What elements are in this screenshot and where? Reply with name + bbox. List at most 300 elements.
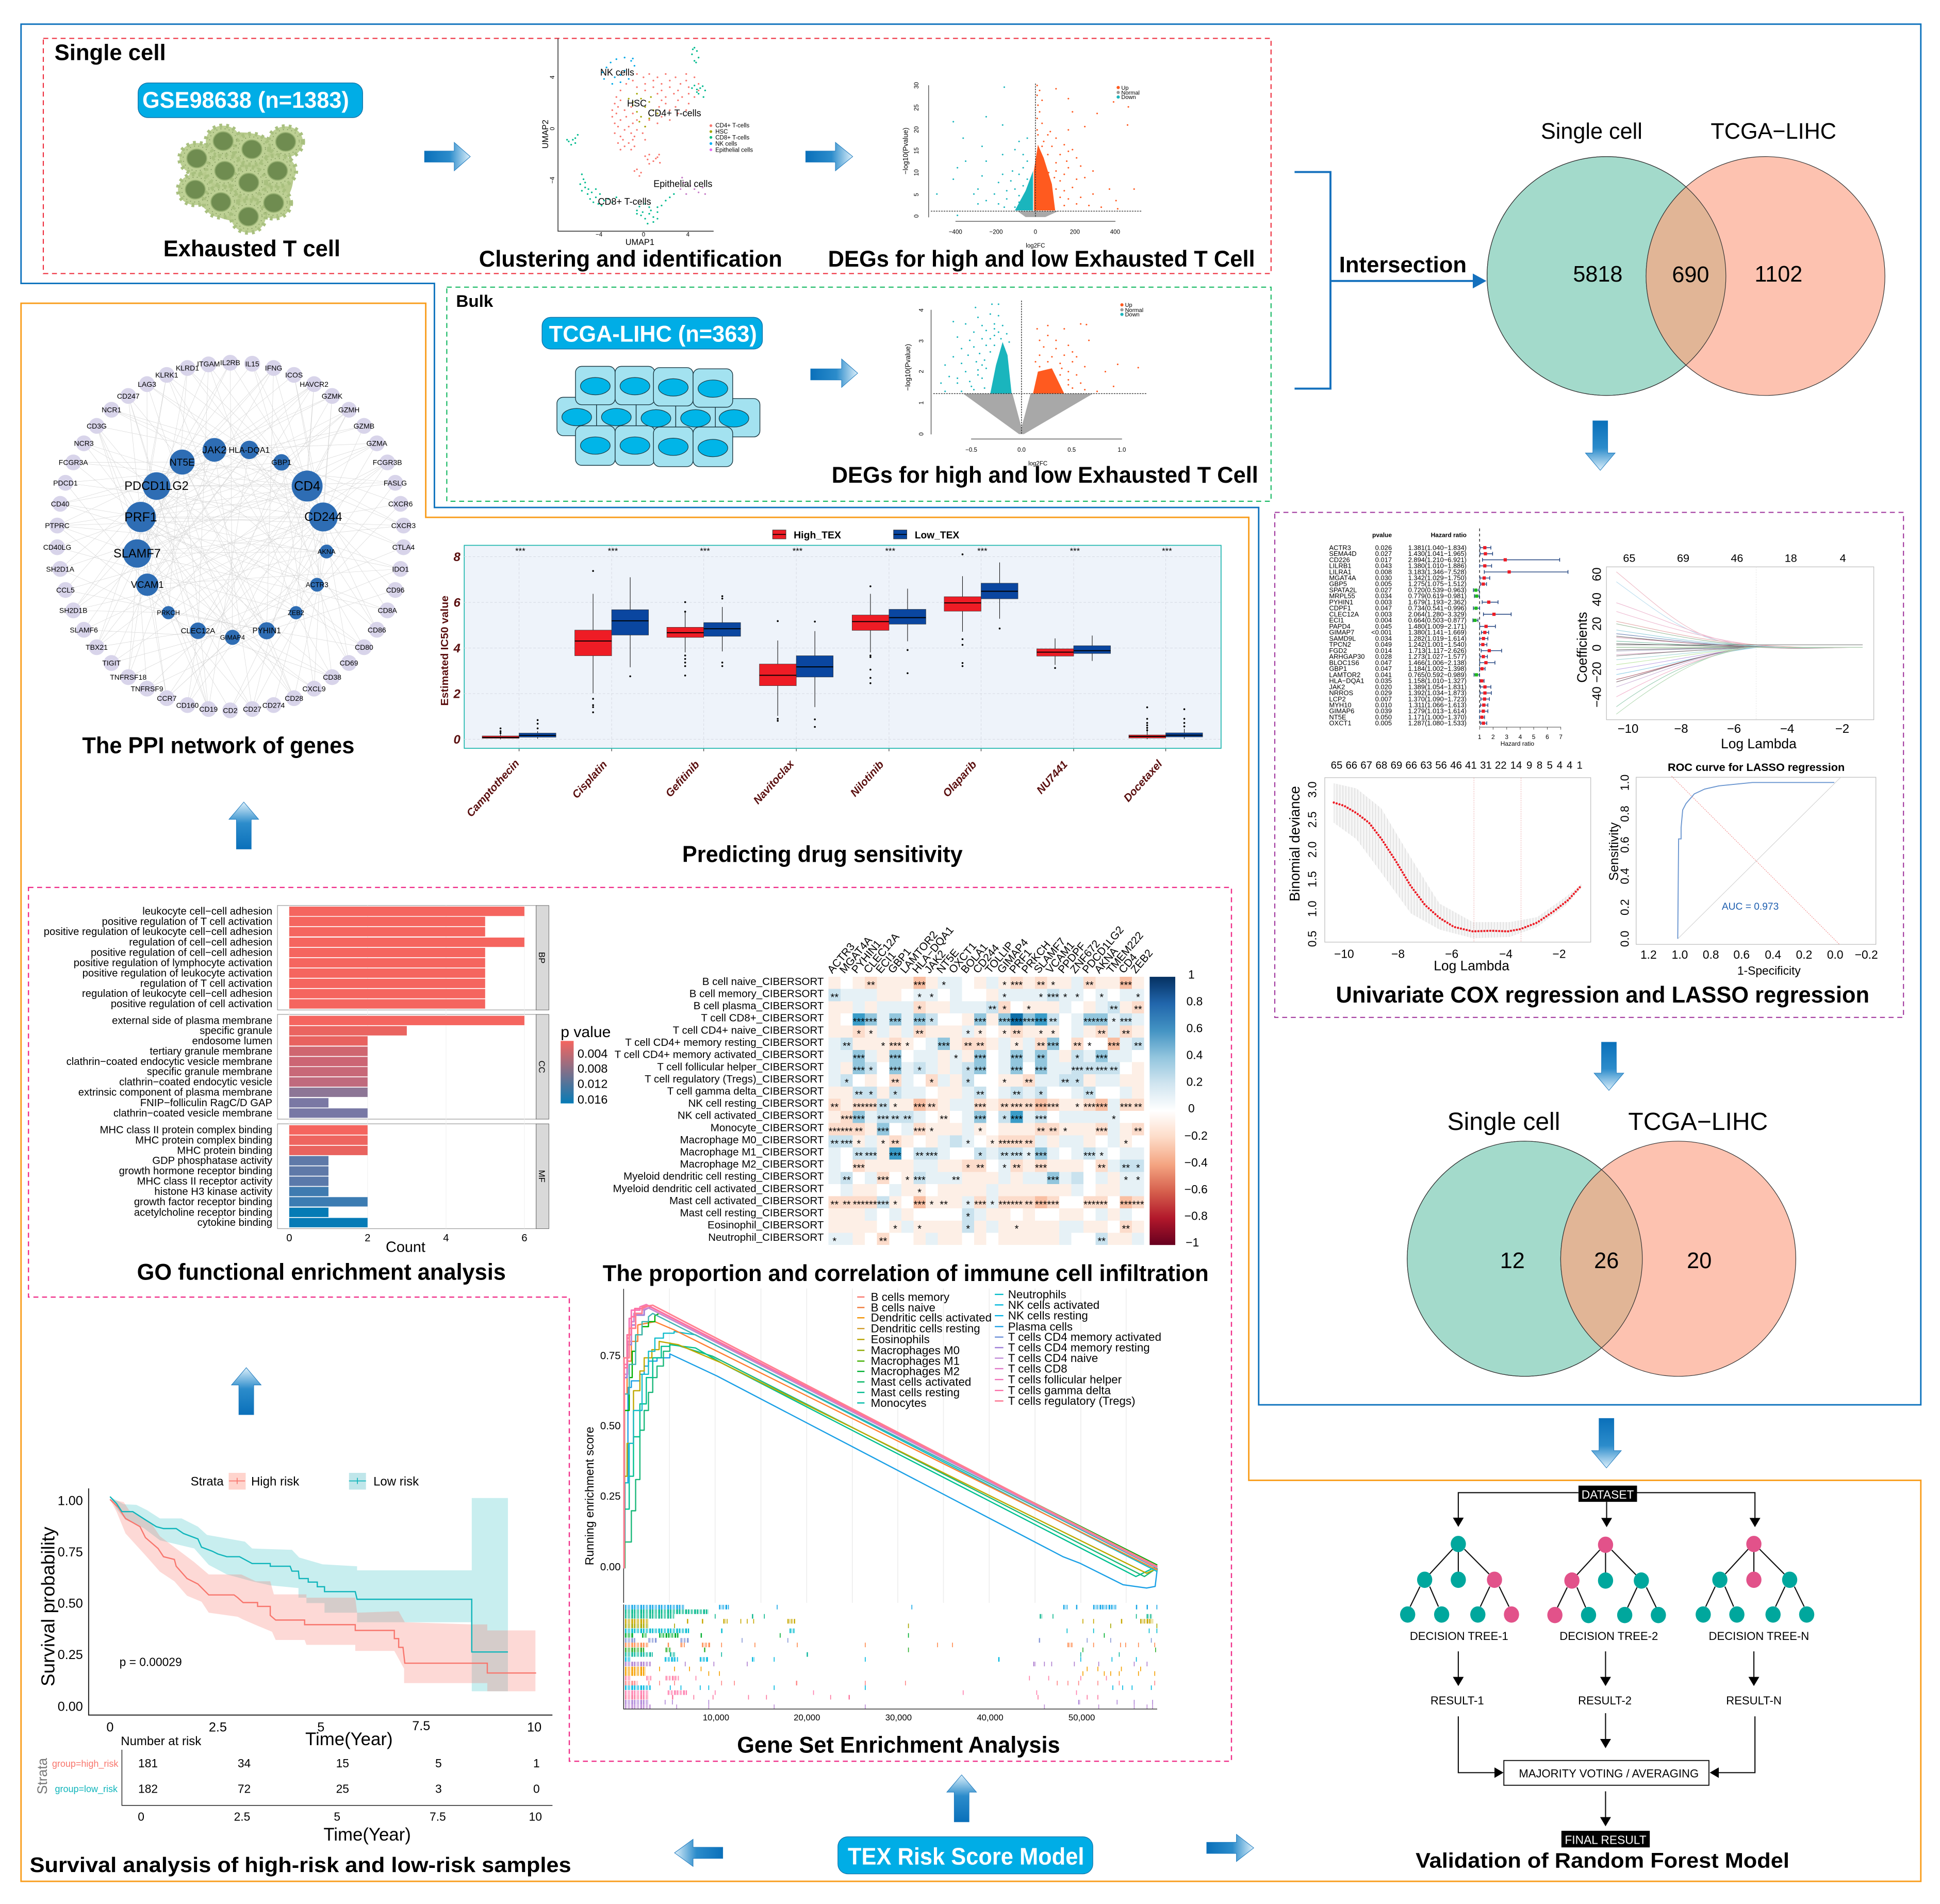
- chart: univariate Cox forest plot: GIMAP6: [1329, 707, 1354, 715]
- chart: PPI network: CD4: [294, 479, 320, 494]
- chart: univariate Cox forest plot: 1.480(1.009−2.171): [1408, 622, 1467, 630]
- chart: PPI network: HLA-DQA1: [229, 446, 270, 455]
- chart: drug sensitivity boxplots: Camptothecin: [464, 758, 522, 819]
- chart: drug sensitivity boxplots: Navitoclax: [751, 758, 797, 807]
- chart: univariate Cox forest plot: 0.664(0.503−0.877): [1408, 616, 1467, 624]
- legend: p value: 0.004: [578, 1047, 608, 1060]
- diagram: random forest: DATASET: [1582, 1488, 1634, 1501]
- chart: drug sensitivity boxplots: 4: [453, 642, 461, 655]
- caption: exhausted T cell: Exhausted T cell: [163, 236, 340, 261]
- chart: LASSO binomial deviance: −8: [1391, 947, 1405, 961]
- chart: univariate Cox forest plot: 1.392(1.034−1.873): [1408, 689, 1467, 697]
- chart: PPI network: CD160: [176, 701, 199, 709]
- chart: LASSO binomial deviance: 31: [1480, 760, 1492, 771]
- chart: GO enrichment bars: endosome lumen: [192, 1036, 272, 1047]
- legend: volcano: Down: [1121, 94, 1136, 101]
- chart: Kaplan-Meier survival curves: 2.5: [209, 1720, 227, 1735]
- arrow: up to GO panel: [232, 1368, 261, 1415]
- bracket arrow: intersection: [1294, 172, 1476, 389]
- legend: survival strata: [191, 1473, 419, 1489]
- table: number at risk: Strata: [35, 1758, 50, 1794]
- chart: LASSO binomial deviance: 3.0: [1305, 781, 1319, 798]
- chart: GO enrichment bars: MHC protein binding: [177, 1145, 272, 1156]
- chart: univariate Cox forest plot: 1.466(1.006−2.138): [1408, 659, 1467, 666]
- chart: LASSO binomial deviance: 41: [1465, 760, 1477, 771]
- chart: GO enrichment bars: growth hormone receptor binding: [119, 1166, 272, 1177]
- chart: immune correlation heatmap: JAK2: [923, 948, 948, 976]
- chart: ROC curve: 0.8: [1618, 806, 1631, 822]
- chart: UMAP clustering: [541, 39, 753, 247]
- chart: GO enrichment bars: specific granule membrane: [147, 1066, 272, 1078]
- legend: UMAP clusters: [710, 123, 753, 153]
- chart: LASSO coefficient paths: 18: [1785, 552, 1797, 565]
- chart: univariate Cox forest plot: 1.430(1.041−1.965): [1408, 550, 1467, 557]
- chart: univariate Cox forest plot: 0.039: [1375, 707, 1392, 715]
- chart: bulk volcano plot: 1.0: [1117, 447, 1126, 453]
- caption: single-cell DEGs: DEGs for high and low Exhausted T Cell: [828, 247, 1255, 272]
- chart: univariate Cox forest plot: LILRA1: [1329, 568, 1352, 576]
- panel frame: bulk: [447, 287, 1271, 501]
- chart: immune correlation heatmap: T cell CD4+ naive_CIBERSORT: [673, 1024, 824, 1036]
- legend: UMAP clusters: HSC: [715, 129, 728, 135]
- arrow: venn to cox: [1585, 421, 1615, 470]
- arrow: up to GSEA: [947, 1775, 977, 1822]
- chart: univariate Cox forest plot: 1.275(1.075−1.512): [1408, 580, 1467, 588]
- chart: univariate Cox forest plot: BLOC1S6: [1329, 659, 1359, 666]
- venn diagram: second intersection: Single cell: [1448, 1108, 1560, 1136]
- arrow: right to random forest: [1207, 1834, 1254, 1862]
- chart: GO enrichment bars: acetylcholine receptor binding: [134, 1207, 272, 1218]
- button: TEX risk score model: [838, 1837, 1093, 1874]
- chart: univariate Cox forest plot: 0.041: [1375, 671, 1392, 679]
- chart: immune correlation heatmap: TMEM222: [1105, 930, 1146, 976]
- chart: univariate Cox forest plot: HLA−DQA1: [1329, 677, 1364, 685]
- chart: immune correlation heatmap: CLEC12A: [862, 931, 902, 976]
- legend: GSEA immune cell sets: Mast cells resting: [871, 1386, 960, 1399]
- legend: p value: [561, 1024, 611, 1106]
- chart: univariate Cox forest plot: SEMA4D: [1329, 550, 1357, 557]
- chart: LASSO binomial deviance: −10: [1334, 947, 1354, 961]
- chart: univariate Cox forest plot: 1.184(1.002−1.398): [1408, 665, 1467, 672]
- chart: GO enrichment bars: MHC class II protein complex binding: [100, 1124, 272, 1136]
- chart: immune correlation heatmap: T cell gamma delta_CIBERSORT: [667, 1086, 824, 1097]
- chart: LASSO binomial deviance: 63: [1420, 760, 1432, 771]
- chart: immune correlation heatmap: B cell plasma_CIBERSORT: [694, 1000, 824, 1012]
- chart: univariate Cox forest plot: 0.010: [1375, 701, 1392, 709]
- chart: ROC curve: 0.6: [1618, 836, 1631, 853]
- chart: PPI network: ITGAM: [197, 359, 220, 368]
- panel frame: single cell: [43, 38, 1271, 273]
- chart: GO enrichment bars: MHC protein complex binding: [135, 1135, 272, 1146]
- chart: immune correlation heatmap: ACTR3: [825, 941, 857, 976]
- chart: univariate Cox forest plot: 0.026: [1375, 544, 1392, 551]
- venn diagram: first intersection: [1487, 119, 1885, 396]
- chart: GO enrichment bars: GDP phosphatase activity: [152, 1155, 273, 1167]
- chart: PPI network: GIMAP4: [220, 633, 245, 641]
- legend: UMAP clusters: NK cells: [715, 141, 737, 147]
- chart: single-cell volcano plot: 5: [914, 193, 920, 196]
- chart: univariate Cox forest plot: 0.007: [1375, 695, 1392, 703]
- chart: drug sensitivity boxplots: 0: [453, 733, 461, 747]
- diagram: random forest: RESULT-2: [1578, 1694, 1632, 1707]
- chart: LASSO binomial deviance: 8: [1537, 760, 1542, 771]
- chart: LASSO binomial deviance: −2: [1553, 947, 1566, 961]
- chart: immune correlation heatmap: CD244: [971, 942, 1002, 976]
- chart: univariate Cox forest plot: 1.171(1.000−1.370): [1408, 713, 1467, 721]
- chart: PPI network: [43, 358, 416, 715]
- arrow: to bulk volcano: [811, 359, 858, 387]
- chart: PPI network: CLEC12A: [181, 627, 215, 635]
- chart: univariate Cox forest plot: CLEC12A: [1329, 610, 1359, 618]
- table: number at risk: group=low_risk: [55, 1784, 118, 1795]
- chart: univariate Cox forest plot: 0.049: [1375, 641, 1392, 648]
- chart: univariate Cox forest plot: 1.380(1.010−1.886): [1408, 562, 1467, 570]
- chart: drug sensitivity boxplots: Olaparib: [941, 759, 979, 799]
- chart: PPI network: SH2D1A: [46, 565, 75, 573]
- legend: UMAP clusters: CD8+ T-cells: [715, 135, 749, 141]
- caption: random forest: Validation of Random Forest Model: [1416, 1849, 1789, 1873]
- chart: drug sensitivity boxplots: NU7441: [1034, 759, 1070, 796]
- table: number at risk: 72: [238, 1782, 251, 1795]
- chart: LASSO binomial deviance: 66: [1405, 760, 1417, 771]
- chart: PPI network: CCL5: [56, 586, 75, 594]
- caption: cox and lasso: Univariate COX regression and LASSO regression: [1336, 982, 1869, 1008]
- chart: univariate Cox forest plot: CDPF1: [1329, 604, 1351, 612]
- chart: single-cell volcano plot: 30: [914, 82, 920, 89]
- chart: LASSO coefficient paths: 65: [1623, 552, 1635, 565]
- chart: drug sensitivity boxplots: Estimated IC50 value: [439, 596, 451, 705]
- chart: univariate Cox forest plot: 1.242(1.001−1.540): [1408, 641, 1467, 648]
- chart: LASSO binomial deviance: [1287, 760, 1591, 974]
- chart: GO enrichment bars: CC: [537, 1060, 547, 1073]
- chart: ROC curve: 0.2: [1796, 948, 1812, 961]
- chart: univariate Cox forest plot: 0.004: [1375, 616, 1392, 624]
- chart: univariate Cox forest plot: GBP1: [1329, 665, 1347, 672]
- chart: immune correlation heatmap: T cell follicular helper_CIBERSORT: [657, 1061, 824, 1073]
- legend: GSEA immune cell sets: Neutrophils: [1008, 1288, 1066, 1301]
- chart: immune correlation heatmap: OXCT1: [947, 940, 979, 976]
- venn diagram: first intersection: 1102: [1754, 262, 1802, 287]
- chart: univariate Cox forest plot: MYH10: [1329, 701, 1352, 709]
- chart: drug sensitivity boxplots: [439, 545, 1222, 819]
- chart: drug sensitivity boxplots: ***: [885, 546, 896, 556]
- legend: GSEA immune cell sets: Macrophages M1: [871, 1355, 960, 1368]
- chart: PPI network: IL2RB: [220, 358, 240, 367]
- chart: ROC curve: 1.2: [1640, 948, 1657, 961]
- chart: drug sensitivity boxplots: ***: [515, 546, 525, 556]
- legend: bulk volcano: [1120, 302, 1143, 318]
- chart: univariate Cox forest plot: SAMD9L: [1329, 634, 1356, 642]
- arrow: to clustering: [424, 142, 470, 171]
- caption: GSEA: Gene Set Enrichment Analysis: [737, 1732, 1060, 1758]
- chart: Kaplan-Meier survival curves: 0.75: [58, 1545, 83, 1560]
- chart: drug sensitivity boxplots: ***: [793, 546, 803, 556]
- legend: GSEA immune cell sets: Macrophages M0: [871, 1344, 960, 1357]
- chart: drug sensitivity boxplots: Gefitinib: [664, 759, 702, 799]
- chart: LASSO binomial deviance: 9: [1526, 760, 1532, 771]
- chart: univariate Cox forest plot: 0.008: [1375, 568, 1392, 576]
- arrow: venn to random forest: [1591, 1418, 1621, 1468]
- chart: PPI network: CD274: [262, 701, 285, 709]
- chart: bulk volcano plot: 0.5: [1067, 447, 1076, 453]
- chart: univariate Cox forest plot: 0.035: [1375, 677, 1392, 685]
- chart: PPI network: CXCR6: [388, 500, 413, 508]
- legend: GSEA immune cell sets: T cells follicular helper: [1008, 1373, 1122, 1386]
- chart: GO enrichment bars: 4: [443, 1233, 449, 1244]
- chart: univariate Cox forest plot: 1.713(1.117−2.626): [1409, 647, 1467, 654]
- chart: GO enrichment bars: positive regulation of lymphocyte activation: [74, 957, 272, 969]
- chart: PPI network: FCGR3B: [373, 458, 402, 467]
- chart: UMAP clustering: −4: [550, 176, 556, 184]
- chart: PPI network: NT5E: [170, 457, 195, 468]
- chart: GO enrichment bars: positive regulation of T cell activation: [102, 916, 272, 927]
- chart: LASSO coefficient paths: −40: [1590, 686, 1604, 708]
- chart: UMAP clustering: UMAP2: [541, 120, 550, 149]
- chart: LASSO binomial deviance: 56: [1435, 760, 1447, 771]
- chart: univariate Cox forest plot: 0.003: [1375, 610, 1392, 618]
- legend: GSEA immune cell sets: Monocytes: [871, 1397, 927, 1409]
- table: number at risk: 15: [336, 1757, 349, 1770]
- chart: LASSO binomial deviance: 1: [1576, 760, 1583, 771]
- chart: univariate Cox forest plot: NRROS: [1329, 689, 1353, 697]
- chart: single-cell volcano plot: −log10(Pvalue): [901, 127, 909, 174]
- chart: immune correlation heatmap: PRKCH: [1020, 939, 1053, 976]
- chart: ROC curve: 1.0: [1672, 948, 1688, 961]
- chart: ROC curve: 0.0: [1618, 931, 1631, 947]
- chart: GO enrichment bars: MHC class II receptor activity: [137, 1176, 273, 1187]
- table: number at risk: group=high_risk: [52, 1759, 119, 1769]
- chart: immune correlation heatmap: T cell regulatory (Tregs)_CIBERSORT: [645, 1073, 824, 1085]
- legend: GSEA immune cell sets: T cells CD4 memory activated: [1008, 1331, 1161, 1343]
- chart: ROC curve: ROC curve for LASSO regression: [1668, 761, 1845, 774]
- chart: GO enrichment bars: growth factor receptor binding: [134, 1196, 272, 1208]
- chart: UMAP clustering: UMAP1: [626, 238, 654, 247]
- caption: bulk DEGs: DEGs for high and low Exhausted T Cell: [832, 463, 1258, 488]
- legend: drug sensitivity groups: Low_TEX: [915, 530, 959, 541]
- venn diagram: first intersection: 5818: [1573, 262, 1622, 287]
- chart: GSEA running enrichment score: 0.25: [600, 1491, 621, 1502]
- chart: UMAP clustering: Epithelial cells: [653, 178, 712, 189]
- legend: GSEA immune cell sets: T cells gamma delta: [1008, 1384, 1111, 1397]
- caption: drug sensitivity: Predicting drug sensitivity: [682, 842, 963, 867]
- chart: immune correlation heatmap: T cell CD4+ memory resting_CIBERSORT: [625, 1037, 824, 1048]
- chart: univariate Cox forest plot: 4: [1519, 733, 1522, 741]
- legend: correlation colour bar: 0.6: [1187, 1022, 1203, 1035]
- chart: PPI network: SLAMF6: [70, 626, 98, 634]
- chart: PPI network: PRF1: [124, 510, 157, 524]
- chart: PPI network: CXCL9: [302, 684, 326, 693]
- legend: correlation colour bar: −0.6: [1185, 1183, 1208, 1196]
- chart: PPI network: TBX21: [86, 643, 108, 651]
- chart: GSEA gene rug: [623, 1604, 1157, 1722]
- chart: immune correlation heatmap: AKNA: [1092, 945, 1121, 976]
- chart: GO enrichment bars: cytokine binding: [198, 1217, 272, 1228]
- heading: single cell: Single cell: [55, 40, 166, 65]
- chart: LASSO coefficient paths: 0: [1590, 644, 1604, 651]
- chart: drug sensitivity boxplots: 2: [453, 687, 461, 701]
- chart: immune correlation heatmap: VCAM1: [1044, 940, 1077, 976]
- chart: univariate Cox forest plot: Hazard ratio: [1501, 740, 1534, 747]
- chart: ROC curve: 0.2: [1618, 899, 1631, 915]
- diagram: random forest: DECISION TREE-2: [1559, 1630, 1658, 1643]
- chart: UMAP clustering: 4: [686, 232, 690, 238]
- chart: ROC curve: 1.0: [1618, 775, 1631, 791]
- chart: GO enrichment bars: [44, 906, 549, 1256]
- chart: ROC curve: 1-Specificity: [1737, 964, 1801, 977]
- legend: correlation colour bar: −0.2: [1185, 1129, 1208, 1142]
- chart: univariate Cox forest plot: 1.279(1.013−1.614): [1408, 707, 1467, 715]
- chart: univariate Cox forest plot: pvalue: [1372, 532, 1392, 539]
- chart: GO enrichment bars: 6: [521, 1233, 528, 1244]
- chart: GO enrichment bars: clathrin−coated endocytic vesicle membrane: [67, 1056, 272, 1068]
- chart: PPI network: GZMB: [354, 422, 374, 430]
- chart: LASSO binomial deviance: 0.5: [1305, 931, 1319, 947]
- legend: p value: 0.016: [578, 1093, 607, 1106]
- legend: GSEA immune cell sets: B cells naive: [871, 1301, 935, 1314]
- chart: GO enrichment bars: Count: [386, 1239, 425, 1256]
- chart: bulk volcano plot: 4: [918, 308, 925, 312]
- chart: single-cell volcano plot: 25: [914, 104, 920, 111]
- chart: immune correlation heatmap: Macrophage M0_CIBERSORT: [680, 1134, 824, 1146]
- legend: correlation colour bar: −1: [1186, 1236, 1199, 1249]
- legend: GSEA immune cell sets: [857, 1288, 1161, 1409]
- chart: PPI network: FASLG: [384, 479, 407, 487]
- chart: univariate Cox forest plot: 1: [1478, 733, 1482, 741]
- chart: Kaplan-Meier survival curves: Survival probability: [38, 1527, 59, 1686]
- chart: GSEA gene rug: 20,000: [794, 1713, 820, 1722]
- chart: ROC curve: 0.0: [1827, 948, 1844, 961]
- chart: single-cell volcano plot: [901, 82, 1142, 249]
- legend: GSEA immune cell sets: B cells memory: [871, 1290, 950, 1303]
- chart: PPI network: PDCD1LG2: [124, 479, 189, 493]
- illustration: bulk cells: [557, 366, 760, 467]
- table: number at risk: 7.5: [430, 1810, 446, 1823]
- venn diagram: second intersection: 12: [1500, 1249, 1525, 1273]
- table: number at risk: 2.5: [234, 1810, 250, 1823]
- chart: PPI network: CD8A: [377, 606, 398, 615]
- chart: bulk volcano plot: 0.0: [1017, 447, 1026, 453]
- chart: LASSO binomial deviance: 22: [1495, 760, 1507, 771]
- chart: LASSO coefficient paths: [1574, 552, 1874, 751]
- chart: univariate Cox forest plot: 1.282(1.019−1.614): [1408, 634, 1467, 642]
- legend: p value: 0.008: [578, 1062, 607, 1075]
- chart: single-cell volcano plot: 10: [914, 169, 920, 176]
- chart: immune correlation heatmap: [613, 924, 1208, 1249]
- panel frame: enrichment: [28, 888, 1231, 1761]
- chart: LASSO binomial deviance: 2.0: [1305, 842, 1319, 858]
- diagram: random forest: MAJORITY VOTING / AVERAGING: [1519, 1767, 1699, 1780]
- chart: PPI network: KLRD1: [176, 364, 199, 372]
- chart: ROC curve: −0.2: [1855, 948, 1878, 961]
- legend: GSEA immune cell sets: Macrophages M2: [871, 1365, 960, 1378]
- chart: univariate Cox forest plot: 3: [1505, 733, 1508, 741]
- chart: GO enrichment bars: regulation of leukocyte cell−cell adhesion: [82, 988, 272, 999]
- chart: LASSO coefficient paths: Log Lambda: [1721, 736, 1797, 751]
- chart: PPI network: FCGR3A: [59, 458, 88, 467]
- chart: LASSO binomial deviance: 14: [1510, 760, 1522, 771]
- chart: PPI network: CD86: [368, 626, 386, 634]
- diagram: random forest: DECISION TREE-N: [1709, 1630, 1809, 1643]
- chart: PPI network: CD80: [355, 643, 373, 651]
- chart: PPI network: IFNG: [265, 364, 282, 372]
- chart: GO enrichment bars: positive regulation of leukocyte activation: [83, 967, 272, 979]
- chart: univariate Cox forest plot: GIMAP7: [1329, 629, 1354, 636]
- chart: univariate Cox forest plot: NT5E: [1329, 713, 1346, 721]
- legend: volcano: Normal: [1121, 90, 1140, 96]
- chart: univariate Cox forest plot: 0.034: [1375, 592, 1392, 600]
- chart: immune correlation heatmap: NK cell resting_CIBERSORT: [688, 1097, 824, 1109]
- chart: univariate Cox forest plot: 1.679(1.193−2.362): [1408, 598, 1467, 606]
- chart: PPI network: HAVCR2: [300, 380, 328, 388]
- chart: LASSO coefficient paths: 46: [1731, 552, 1743, 565]
- chart: PPI network: CXCR3: [391, 521, 416, 530]
- chart: GO enrichment bars: 2: [365, 1233, 370, 1244]
- chart: UMAP clustering: 0: [642, 232, 645, 238]
- chart: GO enrichment bars: extrinsic component of plasma membrane: [78, 1087, 272, 1098]
- chart: PPI network: CD247: [117, 392, 140, 400]
- chart: LASSO binomial deviance: Binomial deviance: [1287, 786, 1303, 901]
- chart: PPI network: PDCD1: [53, 479, 78, 487]
- legend: correlation colour bar: 0.4: [1187, 1048, 1203, 1061]
- chart: univariate Cox forest plot: 3.183(1.346−7.528): [1408, 568, 1467, 576]
- chart: GO enrichment bars: external side of plasma membrane: [112, 1015, 272, 1026]
- chart: UMAP clustering: NK cells: [600, 67, 634, 77]
- chart: GO enrichment bars: FNIP−folliculin RagC/D GAP: [140, 1097, 272, 1109]
- chart: GO enrichment bars: regulation of cell−cell adhesion: [129, 937, 272, 948]
- chart: univariate Cox forest plot: 0.005: [1375, 719, 1392, 727]
- legend: p value: p value: [561, 1024, 611, 1041]
- chart: univariate Cox forest plot: ACTR3: [1329, 544, 1351, 551]
- dataset badge: GSE98638: GSE98638 (n=1383): [142, 88, 349, 113]
- chart: GSEA gene rug: 10,000: [703, 1713, 729, 1722]
- chart: LASSO coefficient paths: −10: [1618, 722, 1638, 736]
- table: number at risk: 0: [138, 1810, 144, 1823]
- chart: univariate Cox forest plot: 0.047: [1375, 604, 1392, 612]
- chart: univariate Cox forest plot: ARHGAP30: [1329, 653, 1364, 661]
- chart: univariate Cox forest plot: 0.043: [1375, 562, 1392, 570]
- table: number at risk: 34: [238, 1757, 251, 1770]
- chart: drug sensitivity boxplots: ***: [977, 546, 988, 556]
- chart: univariate Cox forest plot: 0.005: [1375, 580, 1392, 588]
- chart: PPI network: TNFRSF9: [131, 684, 163, 693]
- chart: GSEA running enrichment score: [583, 1288, 1157, 1603]
- chart: univariate Cox forest plot: LAMTOR2: [1329, 671, 1360, 679]
- chart: drug sensitivity boxplots: ***: [1070, 546, 1080, 556]
- chart: GSEA running enrichment score: 0.00: [600, 1562, 621, 1573]
- chart: univariate Cox forest plot: 1.158(1.010−1.327): [1408, 677, 1467, 685]
- chart: LASSO binomial deviance: 65: [1331, 760, 1342, 771]
- chart: immune correlation heatmap: Myeloid dendritic cell activated_CIBERSORT: [613, 1183, 824, 1194]
- diagram: random forest: RESULT-1: [1431, 1694, 1484, 1707]
- chart: GSEA gene rug: 40,000: [977, 1713, 1004, 1722]
- chart: univariate Cox forest plot: 0.050: [1375, 713, 1392, 721]
- legend: GSEA immune cell sets: T cells CD4 naive: [1008, 1352, 1098, 1365]
- chart: univariate Cox forest plot: 0.047: [1375, 659, 1392, 666]
- legend: p value: 0.012: [578, 1077, 607, 1091]
- chart: univariate Cox forest plot: 1.389(1.054−1.831): [1408, 683, 1467, 691]
- chart: immune correlation heatmap: TOLLIP: [983, 940, 1016, 976]
- caption: PPI network: The PPI network of genes: [82, 733, 354, 758]
- chart: PPI network: CD28: [285, 694, 303, 702]
- chart: PPI network: GBP1: [271, 459, 291, 467]
- venn diagram: second intersection: [1407, 1108, 1796, 1376]
- chart: Kaplan-Meier survival curves: p = 0.00029: [120, 1655, 182, 1668]
- chart: drug sensitivity boxplots: ***: [700, 546, 710, 556]
- chart: PPI network: IL15: [245, 359, 259, 368]
- chart: immune correlation heatmap: ZNF672: [1068, 938, 1103, 976]
- chart: univariate Cox forest plot: 1.370(1.090−1.723): [1408, 695, 1467, 703]
- chart: univariate Cox forest plot: JAK2: [1329, 683, 1345, 691]
